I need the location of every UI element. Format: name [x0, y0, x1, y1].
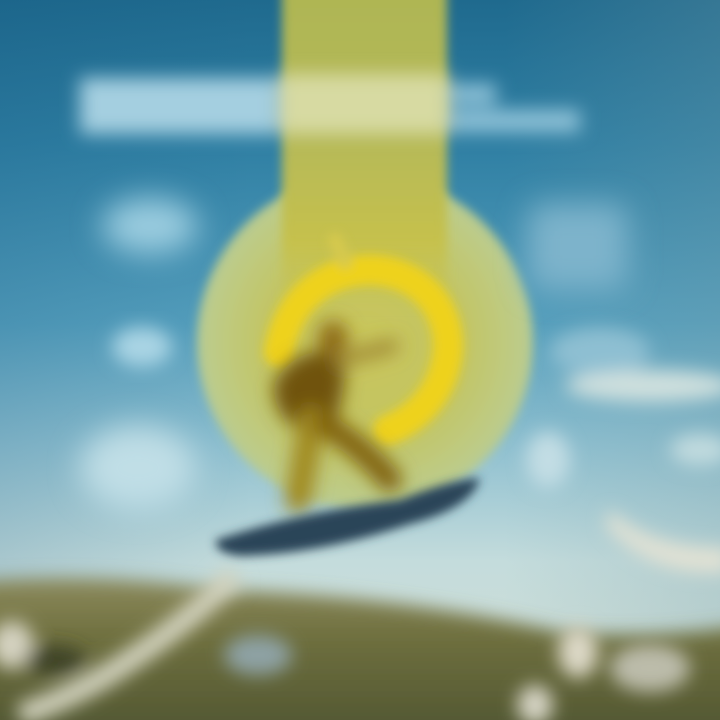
figure: surfboard — [216, 478, 480, 556]
icon: yellow spiral ring — [279, 240, 448, 430]
callout: middle left cloud text — [112, 327, 172, 367]
landscape: white path and rocks — [0, 575, 690, 720]
heading: blurred title block — [80, 74, 580, 134]
callout: lower left cloud — [80, 426, 196, 510]
landscape: hills — [0, 578, 720, 720]
callout: upper left cloud text — [102, 198, 198, 254]
callout: upper right cloud text — [528, 204, 628, 290]
figure: surfer silhouette — [274, 321, 392, 500]
panel: vertical yellow band — [282, 0, 447, 310]
callout: right clouds — [526, 328, 720, 573]
panel: large pale green circle — [197, 174, 533, 510]
